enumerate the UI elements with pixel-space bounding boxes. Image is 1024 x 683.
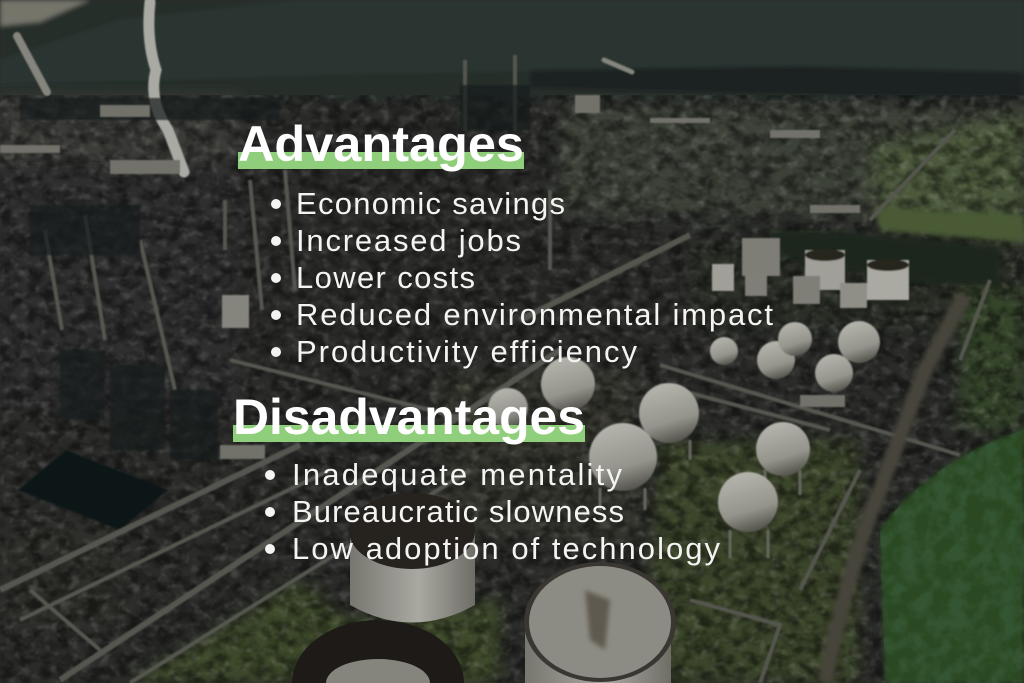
list: advantages: Lower costs	[296, 260, 475, 295]
list: advantages	[271, 186, 773, 369]
smoke plumes	[17, 2, 632, 172]
list: advantages: Reduced environmental impact	[296, 297, 773, 332]
list: advantages: Increased jobs	[296, 223, 521, 258]
list: disadvantages: Low adoption of technology	[292, 531, 720, 566]
road right	[825, 295, 965, 682]
spherical tanks	[488, 321, 880, 558]
dark pond	[18, 450, 168, 530]
heading: Advantages: Advantages	[238, 116, 524, 172]
sky and mountains	[0, 0, 1024, 100]
forest bottom right	[880, 430, 1024, 683]
small light buildings	[0, 95, 860, 459]
list: disadvantages: Inadequate mentality	[292, 457, 622, 492]
list: disadvantages	[265, 457, 720, 566]
plant buildings	[20, 85, 530, 460]
large tanks bottom	[292, 493, 676, 683]
small storage tanks	[222, 238, 909, 328]
list: advantages: Economic savings	[296, 186, 565, 221]
list: disadvantages: Bureaucratic slowness	[292, 494, 624, 529]
list: advantages: Productivity efficiency	[296, 334, 638, 369]
heading: Disadvantages: Disadvantages	[233, 389, 585, 445]
green field strip	[875, 208, 1024, 242]
dark tree line	[770, 232, 1000, 285]
forest texture	[880, 430, 1024, 683]
